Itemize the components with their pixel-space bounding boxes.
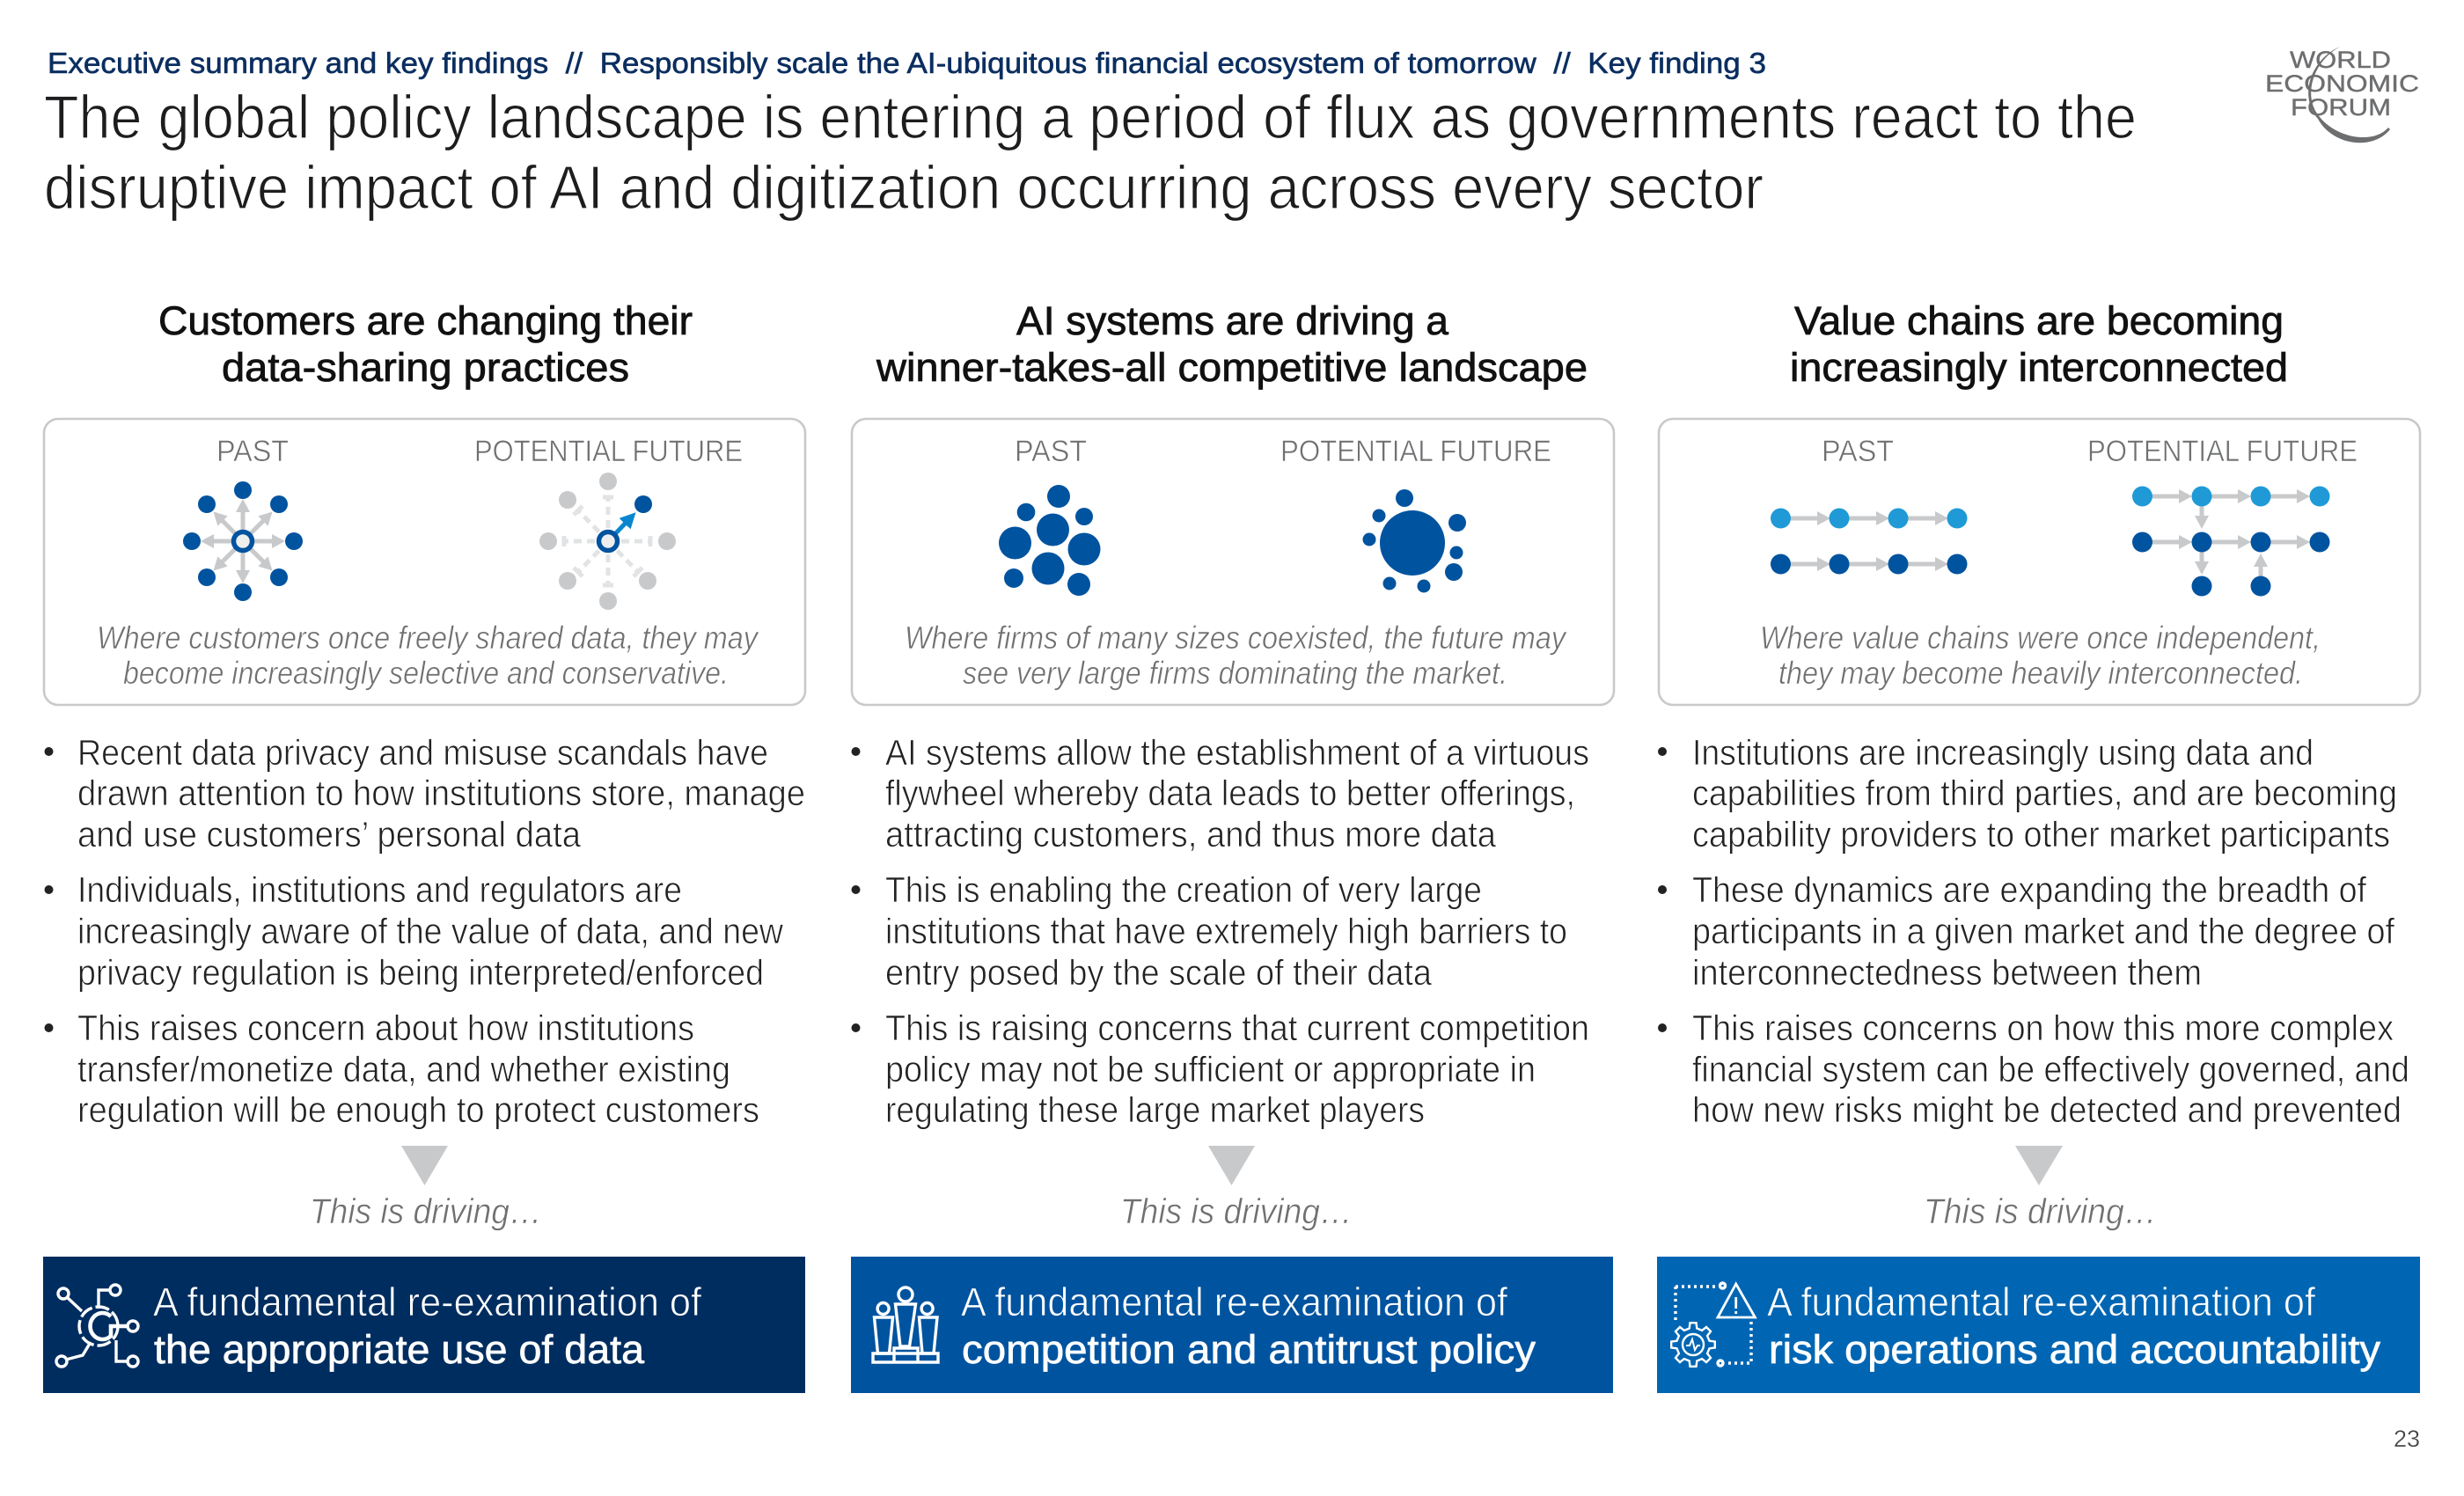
heading — [158, 298, 693, 390]
icon: future hub sharing data selectively — [539, 473, 676, 610]
bullet list: drawn attention to how institutions store, manage — [77, 773, 805, 813]
heading — [876, 298, 1588, 390]
breadcrumb: Executive summary and key findings // Responsibly scale the AI-ubiquitous financial ecosystem of tomorrow // Key finding 3 — [48, 47, 1766, 79]
past and future comparison box: POTENTIAL FUTURE — [2087, 435, 2358, 468]
bullet list: privacy regulation is being interpreted/enforced — [77, 952, 764, 993]
banner: the appropriate use of data: A fundamental re-examination of — [153, 1280, 701, 1324]
icon: one very large firm — [1362, 489, 1466, 593]
bullet list: institutions that have extremely high barriers to — [885, 911, 1567, 951]
heading: AI systems are driving a — [1016, 298, 1449, 343]
bullet list: This is enabling the creation of very large — [885, 869, 1482, 910]
icon: independent value chains — [1771, 509, 1968, 574]
bullet list: This is raising concerns that current competition — [885, 1008, 1589, 1048]
panel: value chains — [1657, 298, 2420, 1393]
icon: World Economic Forum logo — [2265, 47, 2419, 143]
caption — [97, 620, 759, 691]
bullet list: participants in a given market and the degree of — [1692, 911, 2395, 951]
bullet list — [44, 732, 805, 1130]
bullet list: Recent data privacy and misuse scandals have — [77, 732, 768, 773]
bullet list: This raises concern about how institutions — [77, 1008, 694, 1048]
heading: increasingly interconnected — [1790, 345, 2288, 390]
bullet list: regulating these large market players — [885, 1089, 1425, 1130]
heading: winner-takes-all competitive landscape — [876, 345, 1588, 390]
bullet list: AI systems allow the establishment of a virtuous — [885, 732, 1589, 773]
heading: data-sharing practices — [222, 345, 629, 390]
arrow — [1208, 1146, 1255, 1185]
bullet list: transfer/monetize data, and whether existing — [77, 1049, 730, 1089]
caption: Where value chains were once independent, — [1760, 620, 2321, 656]
icon: World Economic Forum logo: FORUM — [2291, 94, 2391, 121]
driving text: This is driving… — [310, 1192, 542, 1231]
past and future comparison box: POTENTIAL FUTURE — [1280, 435, 1551, 468]
heading — [1790, 298, 2288, 390]
page number: 23 — [2394, 1426, 2420, 1452]
bullet list: capability providers to other market participants — [1692, 814, 2390, 854]
caption: see very large firms dominating the market. — [963, 655, 1507, 691]
past and future comparison box: PAST — [1015, 435, 1087, 468]
bullet list: These dynamics are expanding the breadth of — [1692, 869, 2367, 910]
bullet list: capabilities from third parties, and are becoming — [1692, 773, 2397, 813]
bullet list: regulation will be enough to protect customers — [77, 1089, 759, 1130]
caption: Where firms of many sizes coexisted, the future may — [905, 620, 1567, 656]
bullet list: attracting customers, and thus more data — [885, 814, 1496, 854]
banner: risk operations and accountability — [1657, 1257, 2420, 1393]
banner: risk operations and accountability: A fundamental re-examination of — [1767, 1280, 2315, 1324]
title: The global policy landscape is entering a period of flux as governments react to the — [44, 83, 2137, 151]
caption: become increasingly selective and conservative. — [123, 655, 729, 691]
caption: they may become heavily interconnected. — [1778, 655, 2303, 691]
bullet list: increasingly aware of the value of data, and new — [77, 911, 783, 951]
bullet list: how new risks might be detected and prevented — [1692, 1089, 2402, 1130]
bullet list: entry posed by the scale of their data — [885, 952, 1432, 993]
title: disruptive impact of AI and digitization occurring across every sector — [44, 153, 1764, 222]
heading: Customers are changing their — [158, 298, 693, 343]
banner: competition and antitrust policy: competition and antitrust policy — [962, 1327, 1536, 1372]
banner: competition and antitrust policy: A fundamental re-examination of — [961, 1280, 1507, 1324]
bullet list: and use customers’ personal data — [77, 814, 581, 854]
icon: past hub sharing data with all nodes — [183, 481, 303, 601]
past and future comparison box — [852, 419, 1614, 705]
past and future comparison box: PAST — [216, 435, 289, 468]
bullet list: This raises concerns on how this more complex — [1692, 1008, 2394, 1048]
driving text: This is driving… — [1924, 1192, 2157, 1231]
icon: World Economic Forum logo: WORLD — [2290, 47, 2391, 73]
driving text: This is driving… — [1120, 1192, 1353, 1231]
past and future comparison box — [1659, 419, 2420, 705]
banner: the appropriate use of data: the appropriate use of data — [154, 1327, 645, 1372]
icon: warning triangle and gear — [1671, 1283, 1755, 1367]
title — [44, 83, 2137, 222]
arrow — [401, 1146, 448, 1185]
caption — [1760, 620, 2321, 691]
icon: data network — [56, 1285, 138, 1367]
icon: firms of many sizes — [999, 485, 1100, 596]
bullet list: flywheel whereby data leads to better offerings, — [885, 773, 1575, 813]
bullet list — [1658, 732, 2409, 1130]
panel: AI systems and competition — [851, 298, 1614, 1393]
past and future comparison box — [44, 419, 805, 705]
banner: risk operations and accountability: risk operations and accountability — [1769, 1327, 2381, 1372]
bullet list: interconnectedness between them — [1692, 952, 2202, 993]
bullet list: policy may not be sufficient or appropriate in — [885, 1049, 1536, 1089]
past and future comparison box: PAST — [1822, 435, 1894, 468]
icon: interconnected value chains — [2132, 486, 2330, 597]
bullet list: financial system can be effectively governed, and — [1692, 1049, 2409, 1089]
arrow — [2015, 1146, 2063, 1185]
caption — [905, 620, 1567, 691]
past and future comparison box: POTENTIAL FUTURE — [474, 435, 743, 468]
icon: people on podium — [873, 1287, 938, 1362]
bullet list: Individuals, institutions and regulators are — [77, 869, 682, 910]
banner: the appropriate use of data — [43, 1257, 805, 1393]
bullet list — [852, 732, 1589, 1130]
icon: World Economic Forum logo: ECONOMIC — [2265, 70, 2419, 97]
banner: competition and antitrust policy — [851, 1257, 1613, 1393]
heading: Value chains are becoming — [1794, 298, 2284, 343]
panel: customers and data sharing — [43, 298, 805, 1393]
bullet list: Institutions are increasingly using data and — [1692, 732, 2314, 773]
caption: Where customers once freely shared data, they may — [97, 620, 759, 656]
